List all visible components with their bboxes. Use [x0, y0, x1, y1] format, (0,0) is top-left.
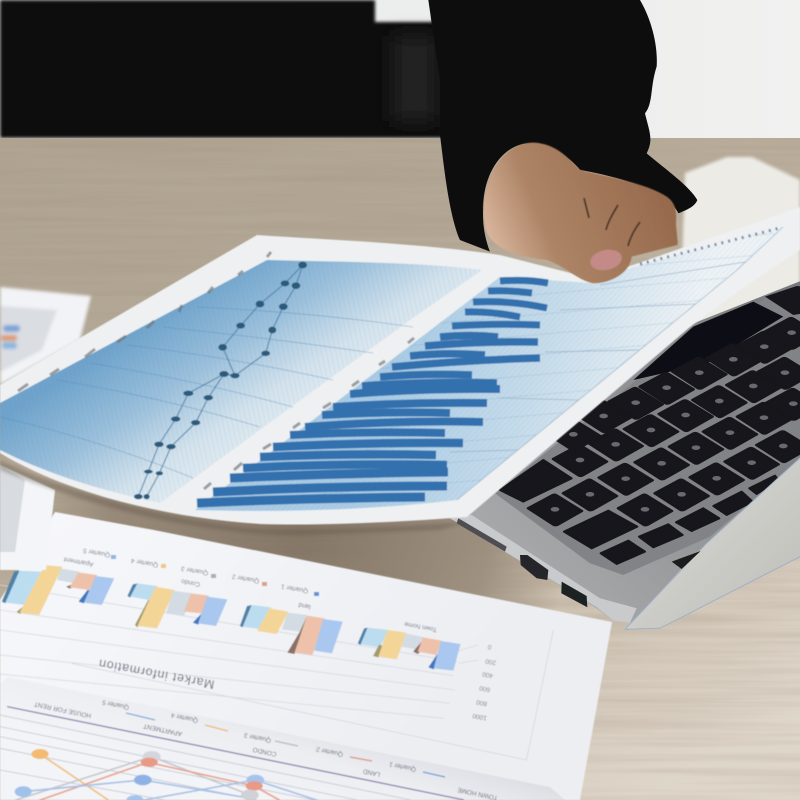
value axis labels: [472, 643, 497, 721]
right bar chart area: [195, 227, 783, 511]
document with market information: [0, 512, 612, 800]
main curved sheet: [0, 207, 800, 535]
small paper upper left: [0, 287, 91, 385]
left area chart: [0, 260, 482, 503]
value axis labels: 400: [481, 670, 494, 679]
line chart legend: Quarter 3: [243, 731, 272, 744]
value axis labels: 0: [487, 643, 492, 650]
thumbnail: [588, 247, 624, 273]
top axis tick row: [640, 228, 780, 264]
bar chart: quarterly values by property type: [0, 565, 553, 760]
line chart legend: Quarter 4: [170, 711, 199, 724]
category labels: Condo: [180, 577, 201, 588]
arm in black sleeve: [428, 0, 697, 252]
line chart legend: LAND: [362, 767, 381, 778]
keys: [500, 286, 800, 564]
chart title: Market information: [97, 656, 216, 692]
white notebook behind the sheet: [680, 157, 800, 330]
bars: land: [240, 605, 343, 655]
category labels: land: [298, 601, 311, 610]
horizontal blue bars: [197, 280, 548, 503]
laptop lid: [625, 455, 800, 629]
line chart legend: HOUSE FOR RENT: [34, 700, 92, 719]
value axis labels: 800: [475, 698, 488, 707]
left chart tick marks: [18, 252, 414, 489]
knuckle creases: [584, 198, 640, 246]
line chart legend: APARTMENT: [143, 722, 183, 737]
hand and thumb: [483, 143, 678, 283]
line chart legend: Quarter 1: [388, 760, 417, 773]
value axis labels: 1000: [472, 712, 487, 721]
chart legend: Quarter 1: [280, 582, 309, 594]
sheet: [0, 207, 800, 525]
laptop front lip: [450, 515, 637, 623]
lid shadow: [672, 551, 701, 569]
line chart legend: [34, 698, 498, 800]
panel: line chart: [0, 677, 565, 800]
keyboard well: [495, 287, 800, 575]
ports: [457, 518, 587, 607]
category labels: [63, 555, 438, 633]
category labels: Town home: [403, 620, 438, 633]
value axis labels: 600: [478, 684, 491, 693]
line chart legend: Quarter 5: [101, 698, 130, 711]
hand holding the sheet: [483, 143, 678, 283]
paper sheet: [0, 512, 612, 800]
chart legend: Quarter 5: [82, 546, 111, 558]
line chart legend: CONDO: [252, 746, 277, 757]
chart legend: Quarter 3: [180, 564, 209, 576]
line chart series and nodes: [0, 707, 464, 800]
chart legend: Quarter 4: [130, 556, 159, 568]
line chart legend: Quarter 2: [315, 745, 344, 758]
sheet shadow: [0, 460, 467, 535]
category labels: Apartment: [63, 555, 94, 568]
bars: town home: [358, 628, 461, 671]
laptop: [450, 280, 800, 629]
bars: apartment: [2, 565, 114, 615]
left chart data lines and markers: [134, 262, 307, 499]
chart legend: [82, 546, 319, 596]
laptop base: [450, 280, 800, 623]
small paper lower left: [0, 465, 55, 570]
bars: condo: [127, 583, 227, 628]
value axis labels: 200: [484, 657, 497, 666]
chart legend: Quarter 2: [231, 572, 260, 584]
